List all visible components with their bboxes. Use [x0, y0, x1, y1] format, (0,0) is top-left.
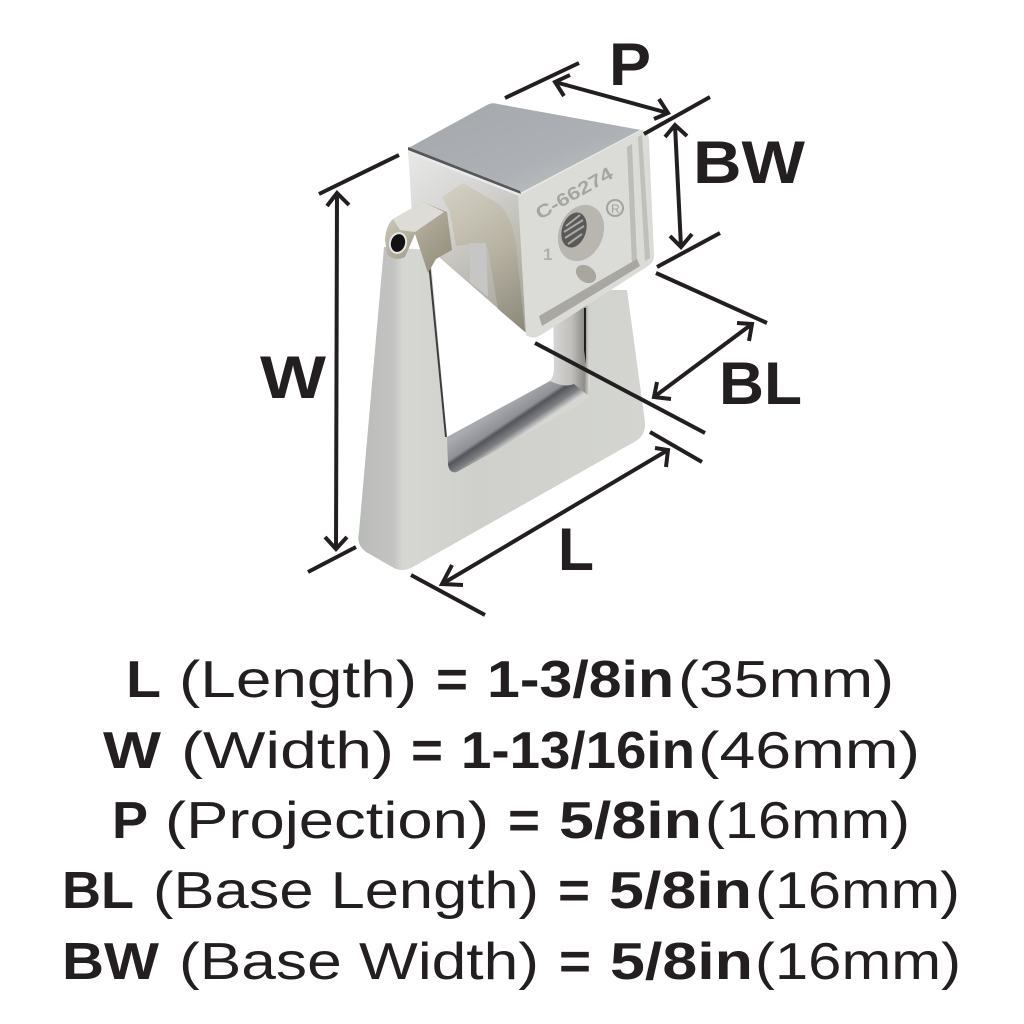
spec line: width: 1-13/16in: [461, 722, 695, 780]
spec line: base length: 5/8in: [609, 862, 752, 920]
label P: P: [609, 31, 651, 98]
frame right rail: [627, 144, 637, 265]
registered mark: [607, 200, 623, 216]
spec line: base length: [62, 862, 960, 920]
spec line: projection: P: [112, 792, 148, 850]
spec line: width: [103, 722, 920, 780]
block top face: [408, 103, 641, 194]
dimension L: [411, 432, 702, 615]
dimension BL: [535, 273, 802, 433]
top face dark edge: [408, 147, 521, 194]
opening interior: [431, 262, 554, 437]
spec line: length: 1-3/8in: [487, 651, 674, 709]
pin hole: [388, 231, 408, 255]
spec line: base width: (16mm): [755, 933, 961, 991]
pin cap highlight: [393, 202, 444, 232]
spec line: base length: (Base Length): [153, 862, 539, 920]
spec line: projection: =: [508, 792, 540, 850]
dimension W: [260, 155, 399, 572]
spec line: length: (Length): [179, 651, 417, 709]
spec line: base width: BW: [62, 933, 160, 991]
label W: W: [260, 344, 326, 411]
spec line: projection: (16mm): [705, 792, 910, 850]
bracket on side face: [442, 183, 525, 332]
dimension BW: [657, 125, 805, 267]
casting mark text: C-66274: [532, 163, 616, 223]
threaded insert: [550, 198, 612, 268]
spec line: length: [126, 651, 894, 709]
spec line: projection: 5/8in: [559, 792, 702, 850]
label L: L: [558, 516, 594, 583]
ring inner post: [550, 290, 590, 400]
frame outer rail: [638, 135, 650, 261]
spec line: width: (46mm): [698, 722, 920, 780]
label BW: BW: [693, 129, 805, 196]
spec text: dimensions list: [62, 651, 961, 991]
bracket inner strip: [470, 243, 488, 297]
ring inner bevel: [447, 381, 590, 472]
spec line: base width: 5/8in: [610, 933, 753, 991]
block front face: [518, 130, 654, 338]
spec line: projection: [112, 792, 910, 850]
spec line: width: W: [103, 722, 162, 780]
casting number: 1: [543, 245, 552, 264]
spec line: base width: [62, 933, 961, 991]
product photo: drop pull: [358, 103, 654, 570]
spec line: base length: (16mm): [755, 862, 960, 920]
spec line: projection: (Projection): [165, 792, 489, 850]
spec line: width: =: [411, 722, 443, 780]
post shadow line: [584, 308, 586, 364]
pivot pin sleeve: [385, 202, 452, 273]
label BL: BL: [719, 350, 802, 417]
spec line: base length: BL: [62, 862, 134, 920]
frame lower rail: [539, 259, 640, 326]
ring pull body with opening: [358, 247, 645, 570]
spec line: length: L: [126, 651, 161, 709]
top face highlight edge: [408, 130, 642, 197]
spec line: length: =: [436, 651, 468, 709]
block side face: [408, 150, 534, 337]
casting dimple: [572, 261, 600, 287]
dimension P: [505, 31, 710, 134]
spec line: base width: =: [559, 933, 591, 991]
spec line: base length: =: [558, 862, 590, 920]
spec line: length: (35mm): [678, 651, 894, 709]
spec line: base width: (Base Width): [179, 933, 539, 991]
spec line: width: (Width): [181, 722, 394, 780]
registered mark: R: [611, 202, 620, 216]
ring inner left edge: [428, 262, 447, 437]
